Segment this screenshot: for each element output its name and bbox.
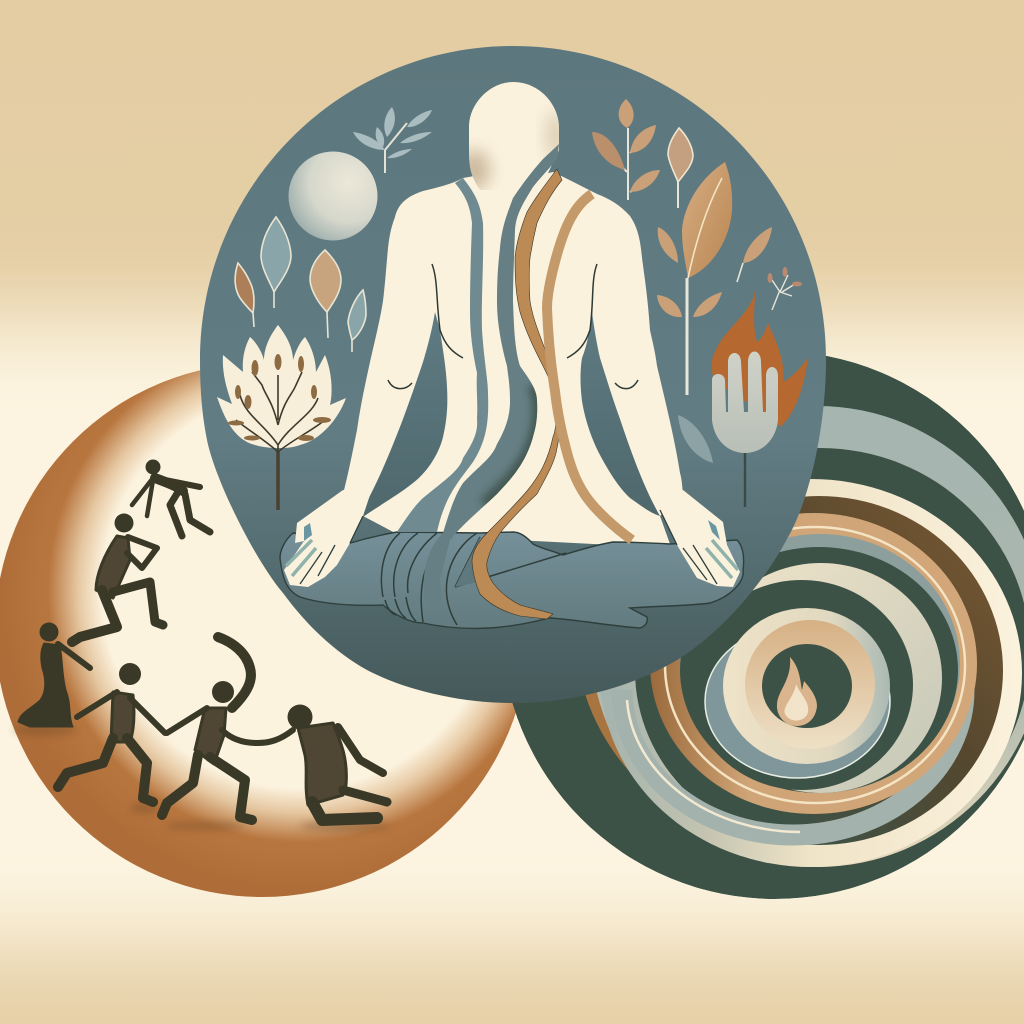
central figure [280, 82, 744, 628]
icon: right large leaf branch [657, 162, 802, 395]
figure legs [280, 532, 744, 628]
figure: top [132, 460, 210, 536]
figure right hand [660, 490, 740, 587]
icon: pale sphere [288, 152, 378, 240]
figure gap: left arm [363, 312, 447, 517]
figure leg folds [381, 533, 566, 625]
figure: running centre-left [58, 663, 165, 802]
icon: flame [777, 657, 817, 726]
figure head [469, 82, 559, 190]
icon: right upper branch [592, 99, 693, 208]
figure: kneeling climber [72, 514, 163, 642]
icon: lotus tree [217, 325, 346, 510]
figure gap: right arm [580, 312, 660, 516]
figure blue back band [424, 144, 559, 616]
panel: left brown circle [0, 363, 529, 897]
figure: seated left [18, 622, 90, 727]
ground shadows [13, 725, 390, 831]
figure tan strap [547, 194, 632, 540]
figure band shading [485, 385, 539, 505]
icon: left leaves [235, 217, 366, 352]
spiral rings [575, 406, 1024, 867]
figure: arm raised [162, 637, 257, 820]
figure body details [388, 264, 638, 389]
figure: kneeling right [257, 704, 387, 820]
figure blue back strap [397, 178, 488, 532]
panel: central blue circle [200, 46, 826, 703]
figure silhouette: torso and arms [343, 172, 683, 545]
icon: flame and hand [712, 290, 808, 507]
group of dancing figures [18, 460, 387, 820]
icon: top sprig [353, 107, 432, 173]
icon: grey leaf [678, 415, 713, 463]
centre disc [762, 644, 852, 728]
figure left hand [284, 490, 370, 587]
figure tan back band [472, 169, 562, 619]
panel: right spiral circle [501, 351, 1024, 899]
